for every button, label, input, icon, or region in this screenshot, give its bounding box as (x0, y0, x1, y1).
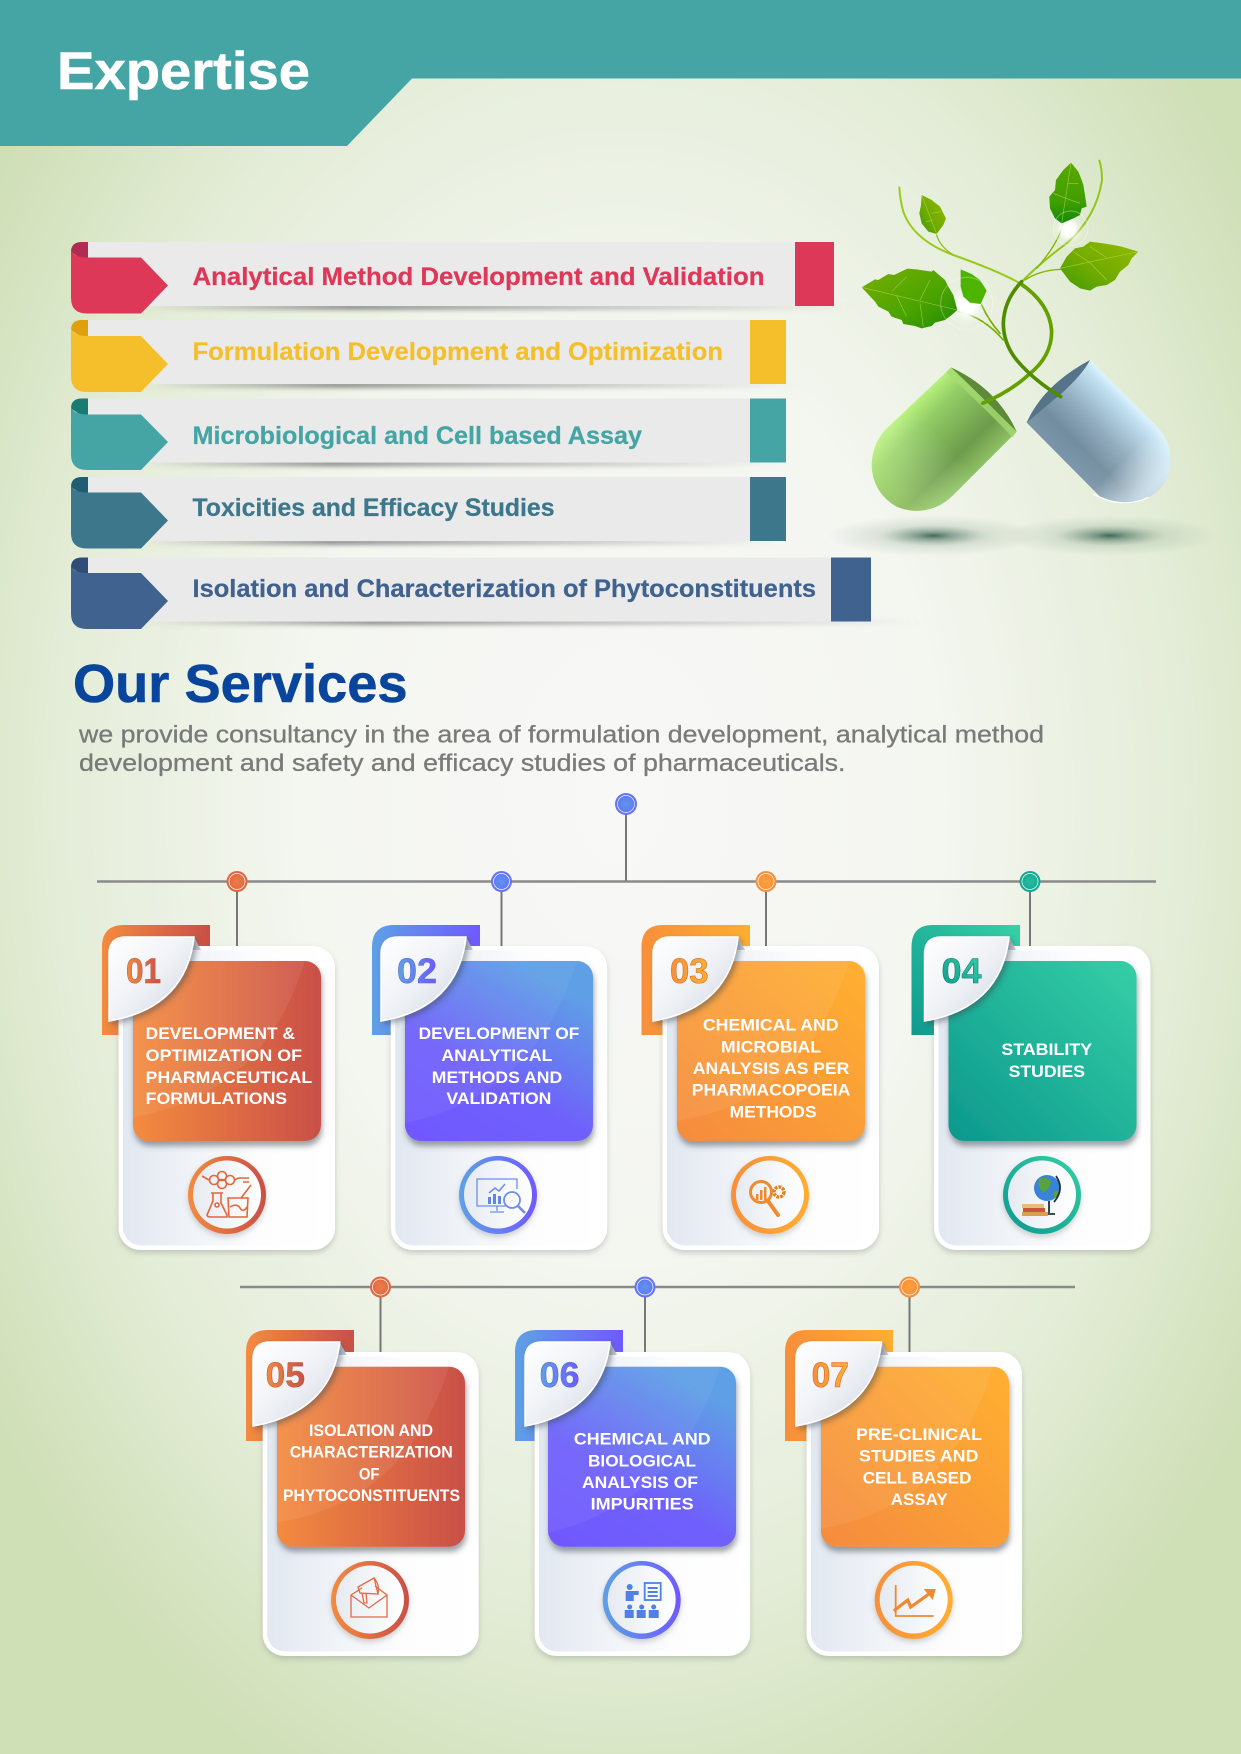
card 07 (785, 1330, 1022, 1656)
node: 03 (756, 871, 776, 892)
ribbon: microbiological assay (71, 398, 786, 470)
node: 06 (634, 1276, 656, 1298)
node: 05 (370, 1276, 391, 1298)
card text 02: DEVELOPMENT OF (419, 1024, 579, 1043)
card 05 (246, 1330, 479, 1656)
icon: rising chart (875, 1561, 953, 1639)
card text 03 (692, 1016, 850, 1121)
icon: monitor chart with magnifier (459, 1156, 537, 1234)
ribbon: isolation and characterization (71, 558, 921, 629)
ribbon: toxicities and efficacy: Toxicities and Efficacy Studies (192, 494, 554, 522)
services intro text: we provide consultancy in the area of formulation development, analytical method (78, 722, 1044, 749)
number 05: 05 (266, 1356, 305, 1395)
card text 07: ASSAY (891, 1490, 948, 1509)
icon: envelope with megaphone (331, 1561, 409, 1639)
number 07: 07 (812, 1356, 849, 1395)
number 01: 01 (126, 952, 161, 991)
card text 07: STUDIES AND (859, 1447, 978, 1466)
card 06 (515, 1330, 750, 1656)
card 01 (102, 925, 335, 1250)
card text 06: ANALYSIS OF (582, 1473, 698, 1492)
card text 05: OF (359, 1464, 379, 1483)
card text 03: CHEMICAL AND (703, 1016, 839, 1035)
card text 06: IMPURITIES (591, 1495, 694, 1514)
illustration: open capsule with plant (827, 161, 1217, 556)
title: Expertise: Expertise (57, 42, 310, 101)
card text 05: ISOLATION AND (309, 1421, 433, 1440)
ribbon: toxicities and efficacy (71, 477, 786, 548)
card text 06 (574, 1430, 711, 1514)
card text 06: CHEMICAL AND (574, 1430, 711, 1449)
card text 02: ANALYTICAL (441, 1046, 552, 1065)
number 06: 06 (540, 1356, 580, 1395)
card text 01 (146, 1024, 312, 1108)
node: top (615, 793, 637, 815)
connector tree: row 2 (240, 1276, 1075, 1353)
plant stems (899, 161, 1102, 403)
number 03: 03 (670, 952, 709, 991)
card text 05: PHYTOCONSTITUENTS (283, 1486, 460, 1505)
ribbon: formulation development (71, 320, 801, 392)
card text 05: CHARACTERIZATION (290, 1443, 453, 1462)
header banner (0, 0, 1241, 146)
card text 01: OPTIMIZATION OF (146, 1046, 302, 1065)
card text 01: FORMULATIONS (146, 1089, 287, 1108)
icon: presenter with audience (603, 1561, 681, 1639)
green capsule (872, 367, 1017, 511)
number 04: 04 (942, 952, 982, 991)
heading: Our Services: Our Services (73, 654, 408, 714)
plant leaves (862, 163, 1138, 329)
card text 06: BIOLOGICAL (588, 1451, 696, 1470)
ribbon: analytical method: Analytical Method Development and Validation (192, 263, 764, 291)
card text 03: METHODS (730, 1102, 817, 1121)
capsule shadows (827, 515, 1217, 556)
card text 03: ANALYSIS AS PER (693, 1059, 849, 1078)
node: 04 (1020, 871, 1040, 892)
card text 02: METHODS AND (432, 1068, 562, 1087)
card text 05 (283, 1421, 460, 1505)
card text 02: VALIDATION (446, 1089, 551, 1108)
card text 01: DEVELOPMENT & (146, 1024, 295, 1043)
card text 03: PHARMACOPOEIA (692, 1081, 850, 1100)
icon: magnifier with gear (731, 1156, 809, 1234)
blue capsule (1027, 360, 1171, 504)
card text 07 (856, 1425, 982, 1509)
card text 01: PHARMACEUTICAL (146, 1068, 312, 1087)
card 04 (912, 925, 1150, 1250)
number 02: 02 (397, 952, 437, 991)
icon: globe and books (1003, 1156, 1081, 1234)
glow highlights (946, 213, 1085, 327)
node: 01 (226, 871, 248, 892)
services intro text (78, 722, 1044, 777)
icon: lab flask and molecules (188, 1156, 266, 1234)
card 03 (642, 925, 879, 1250)
card text 07: CELL BASED (863, 1468, 971, 1487)
expertise ribbon list (71, 242, 921, 629)
card text 04: STUDIES (1009, 1062, 1085, 1081)
card text 04 (1001, 1040, 1093, 1081)
ribbon: microbiological assay: Microbiological and Cell based Assay (192, 422, 642, 450)
ribbon: analytical method (71, 242, 851, 314)
services intro text: development and safety and efficacy studies of pharmaceuticals. (79, 750, 846, 777)
card text 02 (419, 1024, 579, 1108)
card text 03: MICROBIAL (721, 1037, 821, 1056)
node: 07 (899, 1276, 920, 1298)
card text 07: PRE-CLINICAL (856, 1425, 982, 1444)
ribbon: isolation and characterization: Isolation and Characterization of Phytoconstituents (192, 575, 816, 603)
ribbon: formulation development: Formulation Development and Optimization (192, 338, 723, 366)
node: 02 (491, 871, 512, 892)
card 02 (372, 925, 607, 1250)
card text 04: STABILITY (1001, 1040, 1093, 1059)
connector tree: row 1 (97, 793, 1156, 947)
